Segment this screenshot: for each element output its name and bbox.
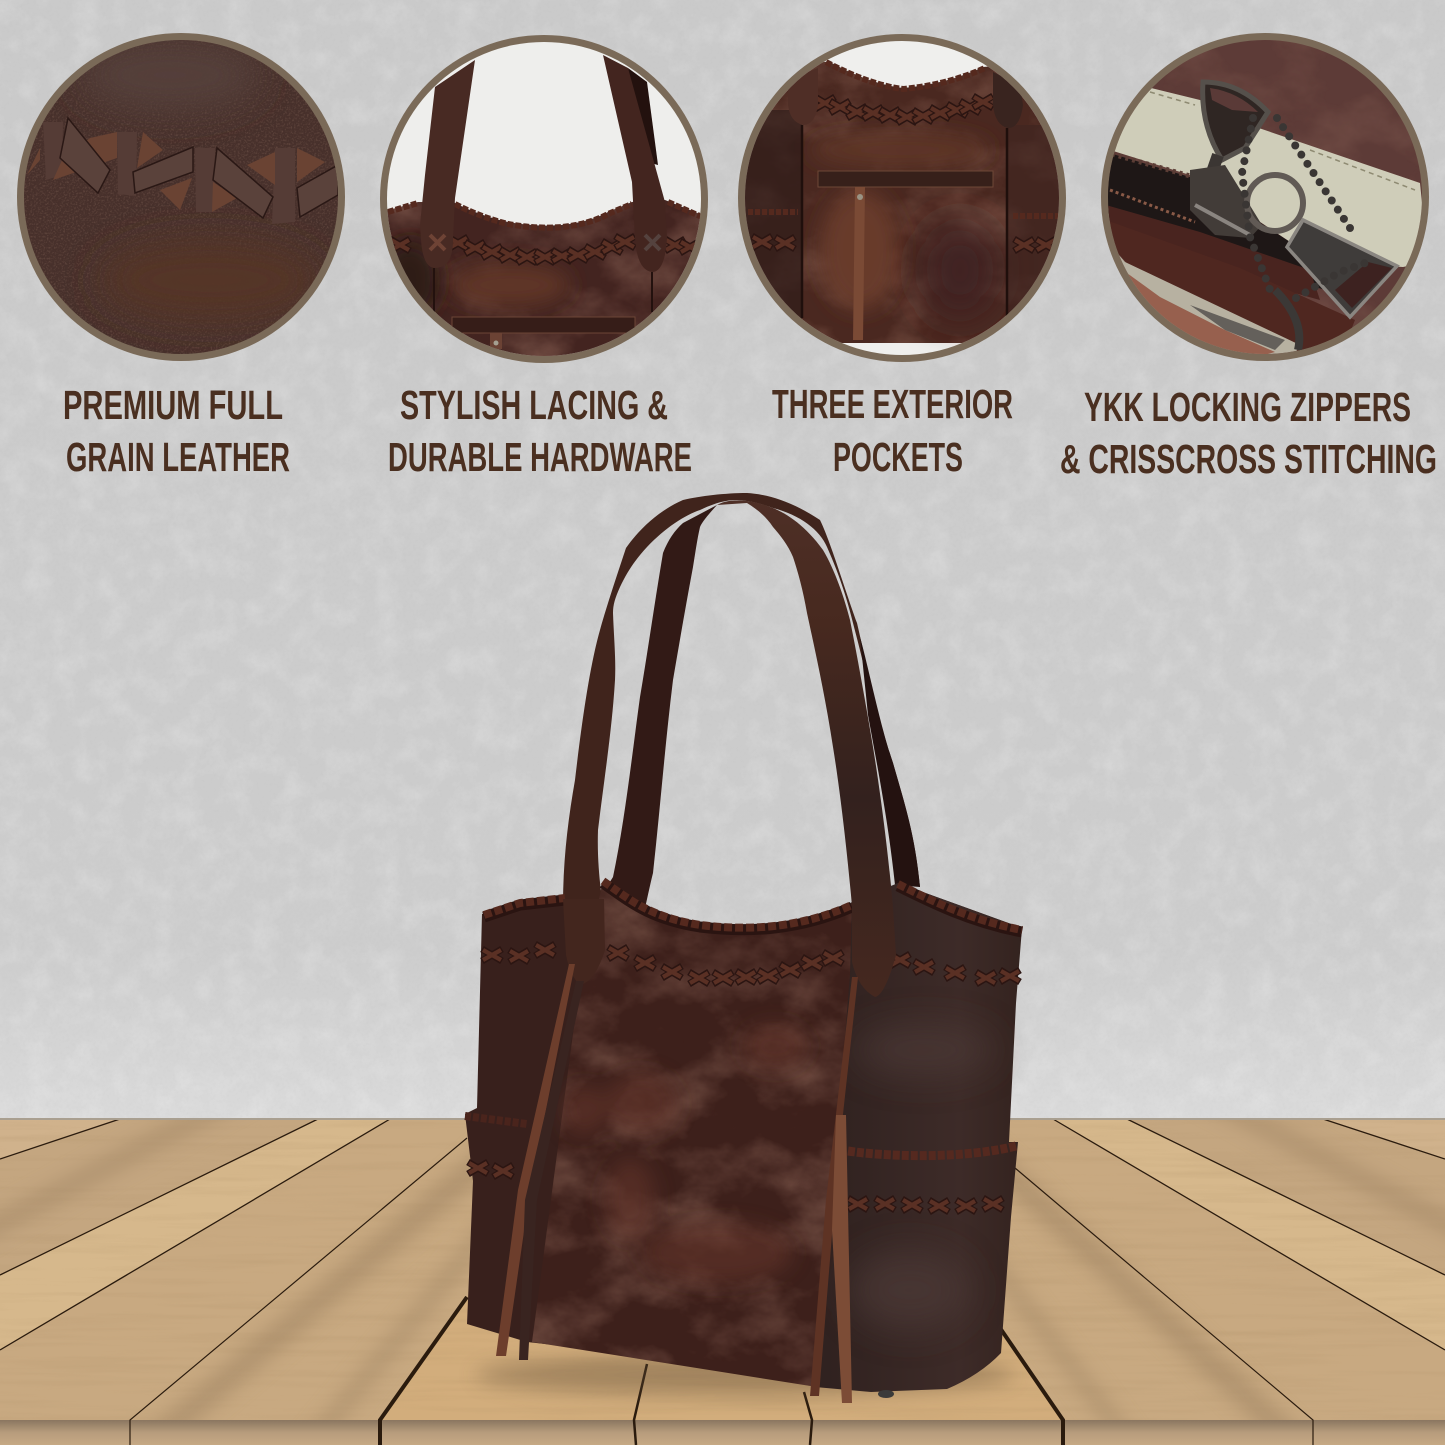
top rim shadow (484, 883, 1022, 932)
crisscross rows (748, 96, 1058, 251)
left tassels (496, 964, 584, 1360)
feature circle 2: lacing and hardware (380, 35, 708, 363)
top rim whipstitch (484, 881, 1022, 930)
caption: three exterior pockets: THREE EXTERIOR (772, 381, 1013, 427)
floor wood streaks (0, 1120, 1445, 1420)
right body inner rim (898, 883, 1022, 935)
caption: three exterior pockets: POCKETS (833, 434, 963, 480)
right side pocket top edge (848, 1146, 1016, 1156)
front handle right section with strap tab (717, 500, 896, 997)
rim whipstitch (826, 62, 985, 89)
tan lacing pieces (1128, 274, 1275, 354)
pocket zipper and tassel (818, 171, 993, 187)
cream canvas lining (1110, 87, 1428, 267)
wall background (0, 0, 1445, 1120)
key (1203, 82, 1268, 178)
inner handle left strap (608, 505, 717, 908)
strap end stitches (430, 235, 445, 250)
right tassels (810, 977, 858, 1403)
caption: premium full grain leather (63, 382, 290, 480)
caption: three exterior pockets (772, 381, 1013, 480)
caption: stylish lacing and durable hardware: DURABLE HARDWARE (388, 434, 692, 480)
printed lining label (1190, 305, 1285, 350)
caption: premium full grain leather: PREMIUM FULL (63, 382, 283, 428)
left side pocket top edge (465, 1116, 527, 1124)
crisscross stitching main row (482, 944, 1020, 984)
bag front panel (532, 881, 852, 1387)
crisscross stitching pocket rows (468, 1162, 1003, 1212)
leather pocket edge (1106, 220, 1355, 362)
zipper teeth and tape (1106, 152, 1325, 290)
rear strap (628, 68, 658, 165)
dark back section of handle (860, 637, 920, 887)
zipper pocket (452, 317, 635, 333)
ring and pull tab (1247, 175, 1397, 317)
caption: stylish lacing and durable hardware: STYLISH LACING & (400, 382, 668, 428)
ball chain (1242, 118, 1368, 298)
bag floor shadow (475, 1355, 1015, 1395)
panel seams (434, 268, 652, 312)
right side sheen (850, 1025, 995, 1330)
wooden floor (0, 1118, 1445, 1445)
zipper slider (1190, 165, 1262, 238)
crisscross row (390, 236, 700, 263)
strap tabs (788, 68, 818, 125)
floor plank gaps (0, 1119, 1445, 1445)
bag left side and pocket (465, 899, 620, 1350)
feature circle 4: YKK locking zipper (1101, 33, 1429, 362)
leather lacing (27, 118, 338, 224)
front panel highlights (562, 1024, 807, 1283)
caption: YKK locking zippers and crisscross stitching (1060, 384, 1437, 482)
outer handle strap (563, 493, 920, 906)
caption: premium full grain leather: GRAIN LEATHER (66, 434, 290, 480)
left strap tab (563, 899, 605, 985)
feature circle 3: exterior pockets (738, 34, 1066, 362)
feature circle 1: full grain leather (17, 33, 345, 361)
split ring (1275, 290, 1299, 350)
straps (420, 60, 475, 268)
rim whipstitch (388, 202, 702, 228)
zipper pull (490, 333, 502, 349)
caption: stylish lacing and durable hardware (388, 382, 692, 480)
bag foot (878, 1390, 894, 1398)
bag right side (815, 883, 1022, 1392)
leather tote bag (465, 493, 1022, 1403)
